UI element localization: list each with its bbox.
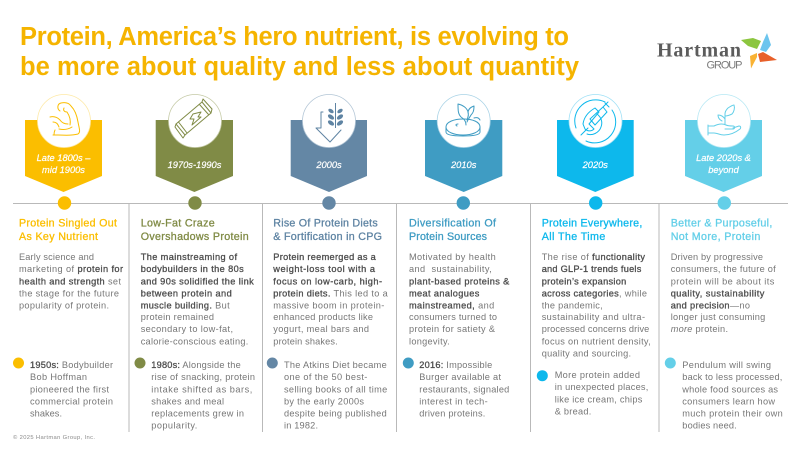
heading: Low-Fat Craze [141,218,215,230]
body text: protein shakes. [273,336,338,346]
date marker pentagon [557,120,634,192]
milestone text: back to less processed, [682,372,782,382]
body text: Early science and [19,252,94,262]
body text: protein will be about its [671,276,775,286]
milestone text: interest in tech- [419,396,488,406]
milestone text: rise of snacking, protein [151,372,255,382]
body text: meat analogues [409,288,480,298]
milestone bullet [134,358,146,368]
body text: quality and sourcing. [542,348,631,358]
milestone text: by the early 2000s [284,396,364,406]
body text: focus on nutrient density, [542,336,651,346]
milestone text: commercial protein [30,396,113,406]
body text: weight-loss tool with a [272,264,376,274]
body text: mainstreamed, and [409,300,494,310]
timeline dot [322,196,336,210]
date label: 2010s [450,160,477,170]
body text: plant-based proteins & [409,276,509,286]
date label [696,153,751,175]
body text: across categories, while [542,288,647,298]
milestone bullet [665,358,676,368]
milestone text: whole food sources as [681,384,778,394]
heading: Better & Purposeful, [671,218,772,230]
milestone text [284,360,387,430]
heading [273,218,382,243]
logo: Hartman Group: Hartman [657,40,741,62]
heading: Overshadows Protein [141,231,249,243]
milestone text: much protein their own [682,408,783,418]
heading: Protein Sources [409,231,487,243]
panel: late 1800s to mid 1900s [13,94,123,418]
timeline axis [13,204,788,432]
body text: and sustainability, [409,264,492,274]
panel: 2000s [267,94,389,430]
panel: 2010s [403,94,509,418]
body text: yogurt, meal bars and [273,324,369,334]
milestone text [419,360,509,418]
milestone text: one of the 50 best- [284,372,367,382]
heading [542,218,642,243]
body text: focus on low-carb, high- [273,276,382,286]
body text: enhanced products like [273,312,373,322]
milestone text: like ice cream, chips [555,394,643,404]
date label: mid 1900s [42,165,85,175]
body text: The rise of functionality [542,252,645,262]
heading: Rise Of Protein Diets [273,218,378,230]
date label: 1970s-1990s [168,160,222,170]
title: Protein, America’s hero nutrient, is evolving to [20,23,569,51]
copyright: © 2025 Hartman Group, Inc. [13,434,95,441]
body text: The mainstreaming of [141,252,237,262]
logo: Hartman Group: GROUP [706,60,742,72]
body text: and GLP-1 trends fuels [542,264,642,274]
date marker pentagon [291,120,367,192]
milestone text: popularity. [151,420,197,430]
icon: GLP-1 syringe [569,94,622,148]
milestone text: More protein added [555,370,640,380]
milestone text: in unexpected places, [555,382,648,392]
icon: plant protein patty [437,94,490,148]
heading: Protein Everywhere, [542,218,642,230]
milestone text [555,370,648,416]
heading: Not More, Protein [671,231,760,243]
icon: flexed muscle [38,94,90,148]
milestone text: despite being published [284,408,387,418]
body text: secondary to low-fat, [141,324,233,334]
heading [409,218,496,243]
body text: more protein. [671,324,728,334]
body text: processed concerns drive [542,324,649,334]
body text: protein remained [141,312,214,322]
body text: muscle building. But [141,300,230,310]
milestone text: The Atkins Diet became [284,360,387,370]
body text: consumers turned to [409,312,497,322]
body text: the stage for the future [19,288,119,298]
timeline dot [58,196,71,210]
date label: 2020s [582,160,608,170]
body text: longevity. [409,336,450,346]
date label: beyond [708,165,740,175]
body text: health and strength set [19,276,121,286]
milestone text: Pendulum will swing [682,360,771,370]
body text: and precision—no [671,300,750,310]
body text [542,252,651,358]
milestone text: bodies need. [682,420,737,430]
heading [671,218,772,243]
date marker pentagon [156,120,233,192]
milestone text [30,360,113,418]
panel: 1970s-1990s [134,94,255,430]
milestone text: driven proteins. [419,408,485,418]
body text [671,252,776,334]
body text: marketing of protein for [19,264,123,274]
milestone text: replacements grew in [151,408,244,418]
date label: 2000s [315,160,342,170]
body text: longer just consuming [671,312,765,322]
milestone bullet [13,358,24,368]
milestone text [151,360,255,430]
body text [19,252,123,310]
body text: Motivated by health [409,252,496,262]
heading: Protein Singled Out [19,218,117,230]
heading: & Fortification in CPG [273,231,382,243]
body text: bodybuilders in the 80s [141,264,244,274]
heading: All The Time [542,231,605,243]
milestone text: pioneered the first [30,384,109,394]
body text [409,252,509,346]
timeline dot [718,196,731,210]
milestone text: intake shifted as bars, [151,384,252,394]
milestone bullet [537,370,548,381]
milestone text: shakes. [30,408,62,418]
milestone bullet [267,358,278,368]
body text: between protein and [141,288,232,298]
heading [19,218,117,243]
heading: Diversification Of [409,218,496,230]
body text [141,252,254,346]
milestone text: selling books of all time [284,384,387,394]
timeline dot [188,196,202,210]
title [20,23,580,81]
milestone text: restaurants, signaled [419,384,509,394]
date marker pentagon [425,120,502,192]
body text [272,252,389,346]
body text: sustainability and ultra- [542,312,645,322]
body text: massive boom in protein- [273,300,384,310]
title: be more about quality and less about quantity [20,53,580,81]
milestone text: in 1982. [284,420,318,430]
body text: Driven by progressive [671,252,763,262]
milestone text: Burger available at [419,372,501,382]
icon: hand holding seedling [698,94,750,148]
body text: Protein reemerged as a [273,252,377,262]
body text: the pandemic, [542,300,603,310]
date marker pentagon [25,120,102,192]
milestone text: 1980s: Alongside the [151,360,241,370]
body text: consumers, the future of [671,264,776,274]
milestone text [681,360,783,430]
timeline dot [457,196,470,210]
milestone text: Bob Hoffman [30,372,87,382]
milestone text: 1950s: Bodybuilder [30,360,113,370]
heading [141,218,249,243]
icon: down arrow with wheat [302,94,356,148]
panel: late 2020s and beyond [665,94,783,430]
heading: As Key Nutrient [19,231,98,243]
body text: and 90s solidified the link [141,276,254,286]
date label: Late 2020s & [696,153,751,163]
milestone text: 2016: Impossible [419,360,492,370]
milestone text: shakes and meal [151,396,224,406]
body text: protein for satiety & [409,324,495,334]
logo: Hartman Group [657,33,777,72]
icon: protein bar [168,94,222,148]
date marker pentagon [685,120,762,192]
milestone text: consumers learn how [682,396,775,406]
body text: popularity of protein. [19,300,109,310]
date label: Late 1800s – [37,153,91,163]
milestone text: & bread. [555,406,591,416]
timeline dot [589,196,602,210]
body text: quality, sustainability [671,288,765,298]
body text: calorie-conscious eating. [141,336,248,346]
milestone bullet [403,358,414,368]
body text: protein diets. This led to a [273,288,389,298]
body text: protein’s expansion [542,276,626,286]
date label [37,153,91,175]
panel: 2020s [537,94,651,416]
